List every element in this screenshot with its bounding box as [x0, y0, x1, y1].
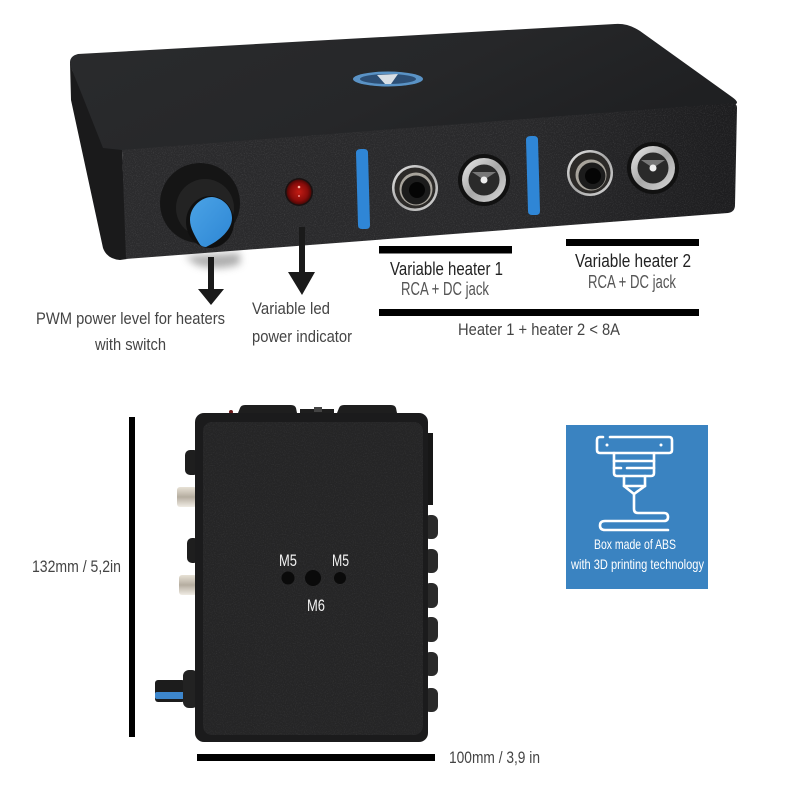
bracket bar: heater 2 [566, 239, 699, 246]
top connectors [229, 405, 397, 414]
back plate [203, 422, 423, 735]
height label: 132mm / 5,2in [32, 557, 121, 576]
knob [160, 163, 240, 248]
shadow under device [185, 253, 240, 268]
label: heater 1: RCA + DC jack [401, 279, 490, 299]
label: current limit: Heater 1 + heater 2 < 8A [458, 320, 621, 339]
box front face [110, 100, 740, 262]
label: heater 2: Variable heater 2 [575, 251, 691, 271]
label: PWM power level [36, 309, 225, 354]
label: heater 2: RCA + DC jack [588, 272, 677, 292]
arrow: led [288, 227, 315, 295]
dots on icon [606, 444, 662, 446]
hole labels [279, 551, 349, 615]
bracket bar: heater 1 [379, 246, 512, 254]
blue divider 2 [526, 136, 540, 215]
body [195, 413, 428, 742]
panel: ABS 3D printing badge [566, 425, 708, 589]
blue divider 1 [356, 149, 370, 229]
hole labels: M6 [307, 596, 325, 615]
icon: 3D printer nozzle [597, 437, 672, 530]
side knob [155, 670, 198, 708]
RCA jack 1 [392, 165, 438, 211]
right side connectors [424, 433, 438, 712]
label: heater 2 [575, 251, 691, 292]
device photo: underside view [155, 405, 438, 742]
logo badge [353, 72, 423, 86]
label: variable led [252, 299, 352, 346]
label: heater 1 [390, 259, 503, 299]
label: PWM power level: with switch [94, 335, 166, 354]
height dimension line [129, 417, 135, 737]
hole labels: M5 [279, 551, 297, 570]
badge text [570, 536, 704, 572]
width label: 100mm / 3,9 in [449, 748, 540, 767]
label: heater 1: Variable heater 1 [390, 259, 503, 279]
badge text: Box made of ABS [594, 536, 676, 552]
DC jack 1 [458, 154, 510, 206]
bracket bar: combined [379, 309, 699, 316]
box left side face [70, 62, 127, 260]
label: variable led: Variable led [252, 299, 330, 318]
RCA jack 2 [567, 150, 613, 196]
arrow: PWM knob [198, 257, 224, 305]
label: variable led: power indicator [252, 327, 352, 346]
device photo: front view of the box [70, 24, 740, 268]
width dimension line [197, 754, 435, 761]
DC jack 2 [627, 142, 679, 194]
led indicator [285, 178, 313, 206]
box top face [70, 24, 737, 152]
mounting holes [282, 570, 346, 586]
left side connectors [177, 450, 199, 595]
hole labels: M5 [332, 551, 349, 570]
badge text: with 3D printing technology [570, 556, 704, 572]
label: PWM power level: PWM power level for heaters [36, 309, 225, 328]
